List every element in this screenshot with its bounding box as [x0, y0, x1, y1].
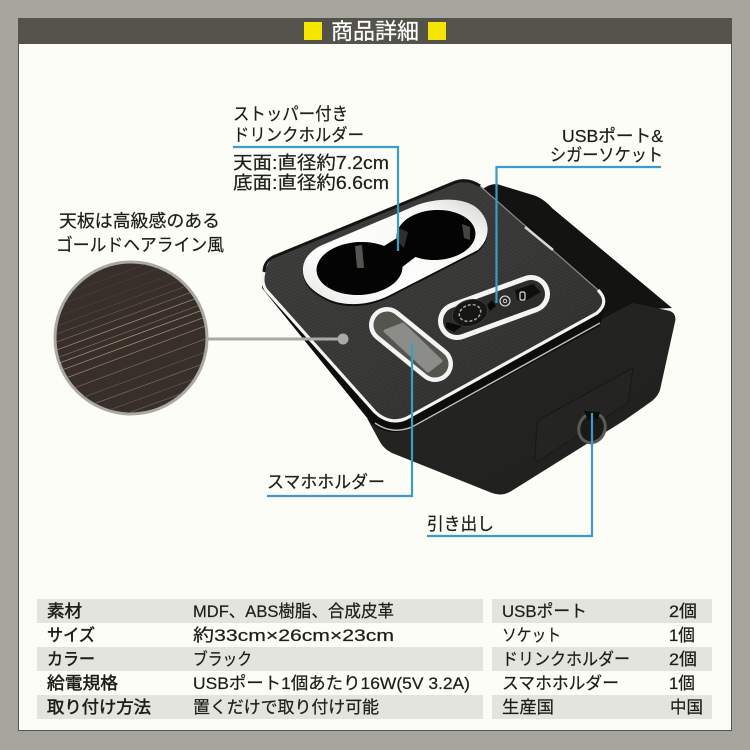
row: drink holder: 2個: [669, 650, 697, 669]
row: power: 給電規格: [47, 674, 118, 693]
spec table: contents: [492, 599, 712, 719]
console back section: [482, 184, 672, 325]
callout: phone holder: [267, 343, 412, 496]
magnified hairline texture circle: [54, 260, 208, 416]
row: phone holder: スマホホルダー: [502, 674, 619, 693]
callout: drink holder: ストッパー付き: [233, 104, 348, 124]
row: mounting: 取り付け方法: [47, 698, 151, 717]
row: USB ports: USBポート: [502, 602, 587, 621]
callout: phone holder: スマホホルダー: [267, 472, 385, 492]
callout: drink holder: 天面:直径約7.2cm: [233, 153, 389, 173]
row: material: MDF、ABS樹脂、合成皮革: [193, 602, 394, 621]
row: USB ports: 2個: [669, 602, 697, 621]
row: country: 生産国: [502, 698, 554, 717]
icon: left yellow square: [304, 22, 322, 40]
row: drink holder: [502, 650, 697, 669]
row: phone holder: 1個: [669, 674, 695, 693]
row: country: [502, 698, 703, 717]
title bar: [18, 18, 732, 44]
callout: USB port and socket: USBポート&: [562, 126, 663, 146]
row: country: 中国: [670, 698, 703, 717]
row: USB ports: [502, 602, 697, 621]
drawer knob: [575, 409, 609, 447]
console front body: [362, 303, 675, 494]
cup holder: [303, 200, 488, 306]
row: size: [47, 626, 394, 645]
drawer panel: [535, 368, 633, 461]
power icon: [500, 296, 510, 306]
product illustration: console: [262, 181, 675, 494]
callout: USB port and socket: [496, 126, 663, 303]
callout: drink holder: ドリンクホルダー: [233, 125, 364, 145]
under-plate layer with silver trim: [262, 275, 604, 432]
row: size: 約33cm×26cm×23cm: [193, 626, 394, 645]
row: phone holder: [502, 674, 695, 693]
cigar socket cap: [449, 295, 491, 331]
row: mounting: [47, 698, 379, 717]
USB ports: [515, 284, 541, 300]
callout: drink holder: [233, 104, 398, 251]
callout: drawer: 引き出し: [427, 514, 494, 534]
row: power: USBポート1個あたり16W(5V 3.2A): [193, 674, 470, 693]
row: material: [47, 602, 394, 621]
USB and cigar socket panel: [446, 284, 541, 332]
top plate: [263, 181, 604, 421]
leader: hairline texture to plate: [207, 334, 348, 344]
spec table: main: [37, 599, 483, 719]
row: mounting: 置くだけで取り付け可能: [193, 698, 379, 717]
row: socket: ソケット: [502, 626, 561, 645]
row: color: [47, 649, 252, 669]
callout: USB port and socket: シガーソケット: [550, 145, 663, 165]
title: 商品詳細: [331, 19, 419, 44]
row: size: サイズ: [47, 626, 95, 645]
callout: drink holder: 底面:直径約6.6cm: [233, 173, 389, 193]
row: power: [47, 674, 470, 693]
callout: drawer: [427, 413, 592, 536]
callout: hairline top text: ゴールドヘアライン風: [56, 235, 224, 255]
callout: hairline top text: 天板は高級感のある: [59, 211, 220, 231]
row: drink holder: ドリンクホルダー: [502, 650, 630, 669]
row: material: 素材: [47, 602, 82, 621]
row: socket: [502, 626, 695, 645]
icon: right yellow square: [428, 22, 446, 40]
phone holder: [385, 324, 441, 371]
row: socket: 1個: [669, 626, 695, 645]
callout: hairline top text: [56, 211, 224, 255]
row: color: カラー: [47, 650, 95, 669]
row: color: ブラック: [193, 649, 252, 669]
